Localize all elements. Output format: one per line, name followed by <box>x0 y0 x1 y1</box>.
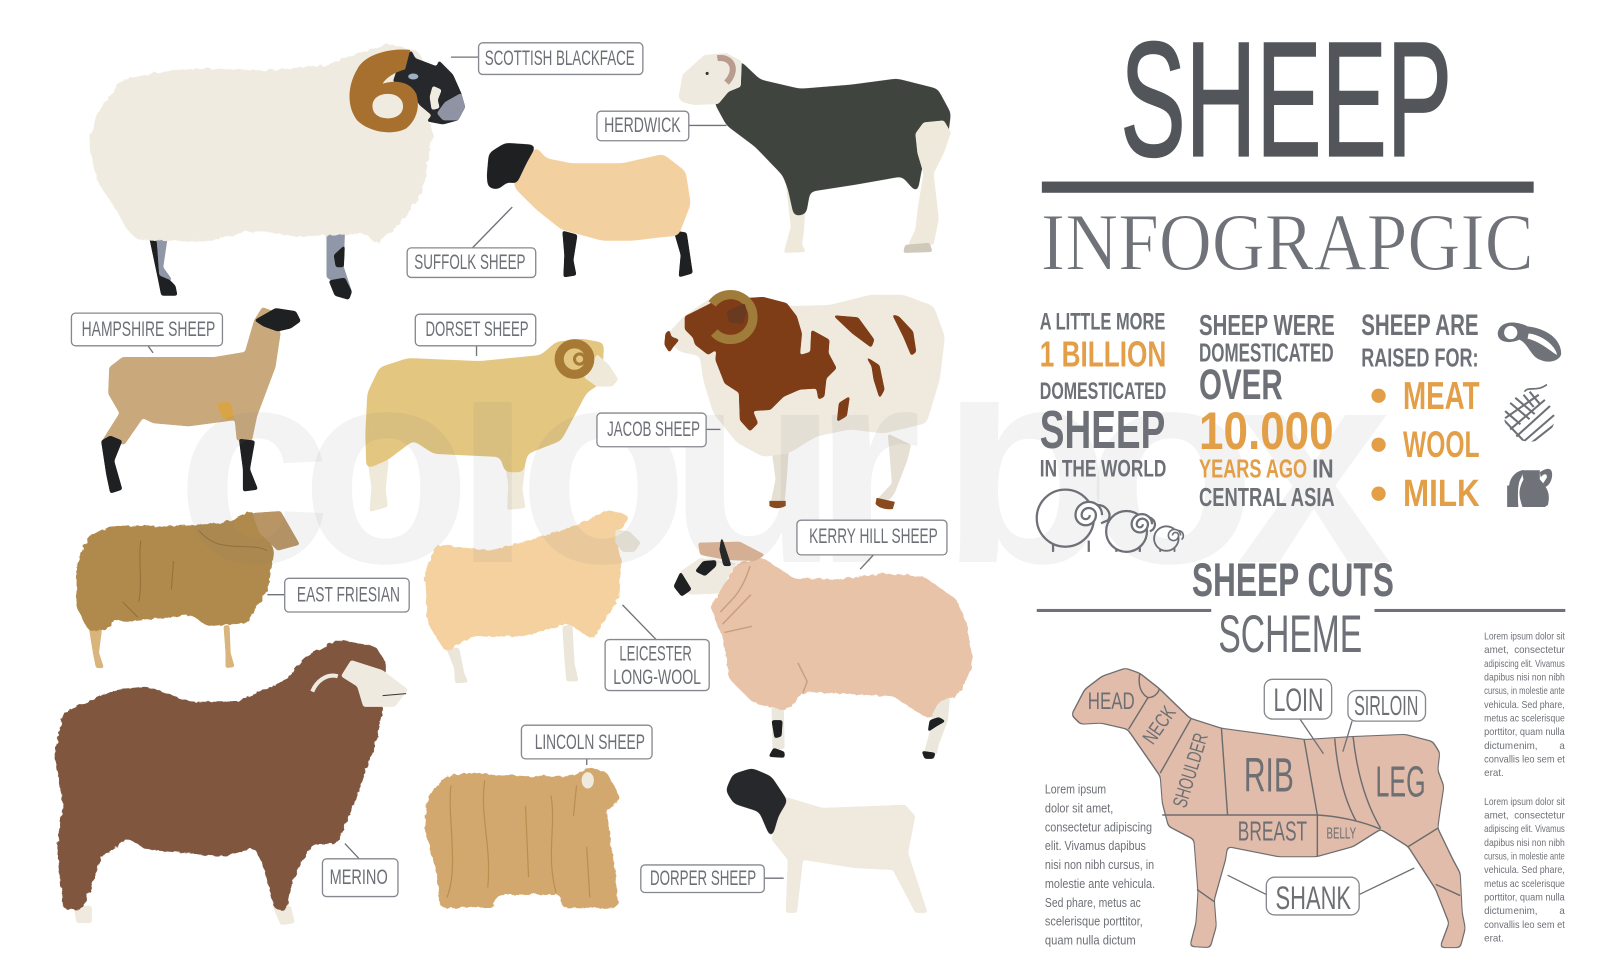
text block: right lorem 1: porttitor, quam nulla <box>1484 727 1565 738</box>
heading: scheme: SCHEME <box>1218 605 1362 664</box>
heading: sheep cuts: SHEEP CUTS <box>1192 554 1394 606</box>
sheep: Kerry Hill <box>673 536 973 759</box>
text block: right lorem 1: erat. <box>1484 768 1504 779</box>
text column: domesticated 10.000 years ago: 10.000 <box>1199 402 1334 461</box>
text block: right lorem 1: adipiscing elit. Vivamus <box>1484 659 1565 670</box>
text column: raised for: SHEEP ARE <box>1361 309 1479 342</box>
text column: raised for: MILK <box>1403 472 1480 514</box>
sheep: Herdwick <box>679 53 951 253</box>
text block: right lorem 1: convallis leo sem et <box>1484 755 1565 766</box>
text block: right lorem 1: dictum <box>1484 741 1513 752</box>
sheep: Jacob <box>664 295 945 509</box>
label: Scottish Blackface <box>451 43 643 74</box>
text column: domesticated 10.000 years ago: YEARS AGO <box>1199 456 1307 484</box>
label: Leicester Long-Wool: LONG-WOOL <box>613 665 701 689</box>
text column: domesticated 10.000 years ago <box>1199 310 1335 512</box>
text column: 1 billion sheep: A LITTLE MORE <box>1040 309 1165 336</box>
text block: right lorem 2 <box>1484 797 1566 944</box>
text block: right lorem 1: Lorem ipsum dolor sit <box>1484 632 1565 643</box>
text block: left lorem: nisi non nibh cursus, in <box>1045 857 1154 872</box>
callout: loin <box>1264 679 1332 754</box>
text block: right lorem 2: porttitor, quam nulla <box>1484 892 1565 903</box>
text block: right lorem 1: dapibus nisi non nibh <box>1484 673 1565 684</box>
label: Dorper <box>641 865 784 892</box>
watermark: colourbox <box>177 311 1393 622</box>
text block: right lorem 2: a <box>1559 906 1565 917</box>
label: East Friesian: EAST FRIESIAN <box>297 582 400 606</box>
text column: domesticated 10.000 years ago: IN <box>1312 456 1334 484</box>
title rule <box>1042 182 1534 193</box>
text block: left lorem: consectetur adipiscing <box>1045 819 1152 834</box>
text block: right lorem 1: amet, <box>1484 645 1509 656</box>
icon: yarn ball <box>1504 385 1556 443</box>
label: Suffolk: SUFFOLK SHEEP <box>414 250 526 274</box>
text block: right lorem 2: metus ac scelerisque <box>1484 879 1565 890</box>
text block: left lorem: scelerisque porttitor, <box>1045 914 1143 929</box>
text block: left lorem: Sed phare, metus ac <box>1045 895 1141 910</box>
text block: left lorem: Lorem ipsum <box>1045 782 1106 797</box>
sheep: Hampshire <box>101 307 301 494</box>
text block: left lorem <box>1045 782 1155 948</box>
text column: 1 billion sheep: IN THE WORLD <box>1040 456 1166 483</box>
text column: raised for: WOOL <box>1403 424 1480 465</box>
cut label: leg: LEG <box>1376 758 1426 807</box>
icon: meat <box>1498 322 1561 362</box>
cut label: shoulder: SHOULDER <box>1169 731 1213 810</box>
text column: domesticated 10.000 years ago: OVER <box>1199 361 1283 409</box>
label: Scottish Blackface: SCOTTISH BLACKFACE <box>485 46 635 70</box>
sheep: Leicester <box>424 510 641 683</box>
label: Lincoln: LINCOLN SHEEP <box>535 730 645 754</box>
text block: right lorem 2: erat. <box>1484 933 1504 944</box>
sheep: Lincoln <box>424 768 621 908</box>
label: Leicester Long-Wool: LEICESTER <box>619 641 692 665</box>
text block: left lorem: quam nulla dictum <box>1045 933 1136 948</box>
sheep: Suffolk <box>487 143 693 277</box>
text block: right lorem 2: convallis leo sem et <box>1484 920 1565 931</box>
text block: left lorem: molestie ante vehicula. <box>1045 876 1155 891</box>
text column: 1 billion sheep <box>1040 309 1166 483</box>
text column: domesticated 10.000 years ago: CENTRAL ASIA <box>1199 484 1335 512</box>
text block: right lorem 1: a <box>1559 741 1565 752</box>
label: Jacob: JACOB SHEEP <box>607 417 700 441</box>
callout: shank: SHANK <box>1276 879 1351 916</box>
callout: loin: LOIN <box>1273 681 1323 718</box>
label: Merino: MERINO <box>330 865 388 889</box>
text block: right lorem 1: metus ac scelerisque <box>1484 714 1565 725</box>
label: Jacob <box>597 413 720 447</box>
callout: sirloin: SIRLOIN <box>1354 690 1418 721</box>
cut label: rib: RIB <box>1244 750 1294 803</box>
text block: right lorem 2: dictum <box>1484 906 1513 917</box>
sheep: Dorset <box>365 339 618 512</box>
cut label: neck: NECK <box>1139 702 1181 748</box>
label: Leicester Long-Wool <box>605 605 709 691</box>
text column: raised for: MEAT <box>1403 375 1480 418</box>
text column: raised for <box>1361 309 1480 514</box>
label: Dorset <box>415 314 536 356</box>
text block: left lorem: dolor sit amet, <box>1045 800 1113 815</box>
icon: sheep population <box>1037 490 1183 552</box>
sheep: Merino <box>54 640 408 925</box>
diagram: sheep cuts <box>1071 668 1465 948</box>
text block: right lorem 1 <box>1484 632 1566 779</box>
text block: right lorem 2: vehicula. Sed phare, <box>1484 865 1565 876</box>
cut label: head: HEAD <box>1088 688 1135 715</box>
sheep: East Friesian <box>77 510 300 668</box>
subtitle: INFOGRAPGIC: INFOGRAPGIC <box>1041 196 1534 287</box>
text block: right lorem 2: consectetur <box>1514 810 1566 821</box>
text block: right lorem 2: enim, <box>1514 906 1537 917</box>
label: Merino <box>322 844 398 897</box>
text column: raised for: RAISED FOR: <box>1361 344 1479 372</box>
text block: right lorem 1: enim, <box>1514 741 1537 752</box>
heading rules <box>1037 609 1565 612</box>
label: Kerry Hill: KERRY HILL SHEEP <box>809 524 938 548</box>
sheep: Dorper <box>726 768 928 913</box>
callout: sirloin <box>1343 690 1426 752</box>
text block: right lorem 2: amet, <box>1484 810 1509 821</box>
label: Hampshire: HAMPSHIRE SHEEP <box>82 317 215 341</box>
label: Dorset: DORSET SHEEP <box>426 317 529 341</box>
callout: shank <box>1228 868 1414 916</box>
label: Kerry Hill <box>797 520 947 569</box>
text column: 1 billion sheep: DOMESTICATED <box>1040 378 1166 405</box>
text block: right lorem 1: consectetur <box>1514 645 1566 656</box>
text block: right lorem 2: dapibus nisi non nibh <box>1484 838 1565 849</box>
label: Suffolk <box>407 207 536 277</box>
text block: left lorem: elit. Vivamus dapibus <box>1045 838 1146 853</box>
label: East Friesian <box>267 578 409 612</box>
label: Dorper: DORPER SHEEP <box>650 866 756 890</box>
label: Lincoln <box>521 725 652 765</box>
text column: 1 billion sheep: 1 BILLION <box>1040 334 1166 374</box>
text column: 1 billion sheep: SHEEP <box>1040 400 1165 460</box>
text block: right lorem 2: Lorem ipsum dolor sit <box>1484 797 1565 808</box>
cut label: breast: BREAST <box>1238 815 1307 846</box>
text block: right lorem 2: cursus, in molestie ante <box>1484 851 1565 862</box>
text block: right lorem 1: cursus, in molestie ante <box>1484 686 1565 697</box>
label: Hampshire <box>71 313 222 353</box>
sheep: Scottish Blackface <box>89 44 465 300</box>
label: Herdwick: HERDWICK <box>604 113 681 137</box>
text block: right lorem 2: adipiscing elit. Vivamus <box>1484 824 1565 835</box>
icon: pitcher <box>1507 469 1552 507</box>
text column: domesticated 10.000 years ago: DOMESTICATED <box>1199 339 1334 367</box>
text block: right lorem 1: vehicula. Sed phare, <box>1484 700 1565 711</box>
text column: domesticated 10.000 years ago: SHEEP WERE <box>1199 310 1335 342</box>
cut label: belly: BELLY <box>1327 825 1356 842</box>
